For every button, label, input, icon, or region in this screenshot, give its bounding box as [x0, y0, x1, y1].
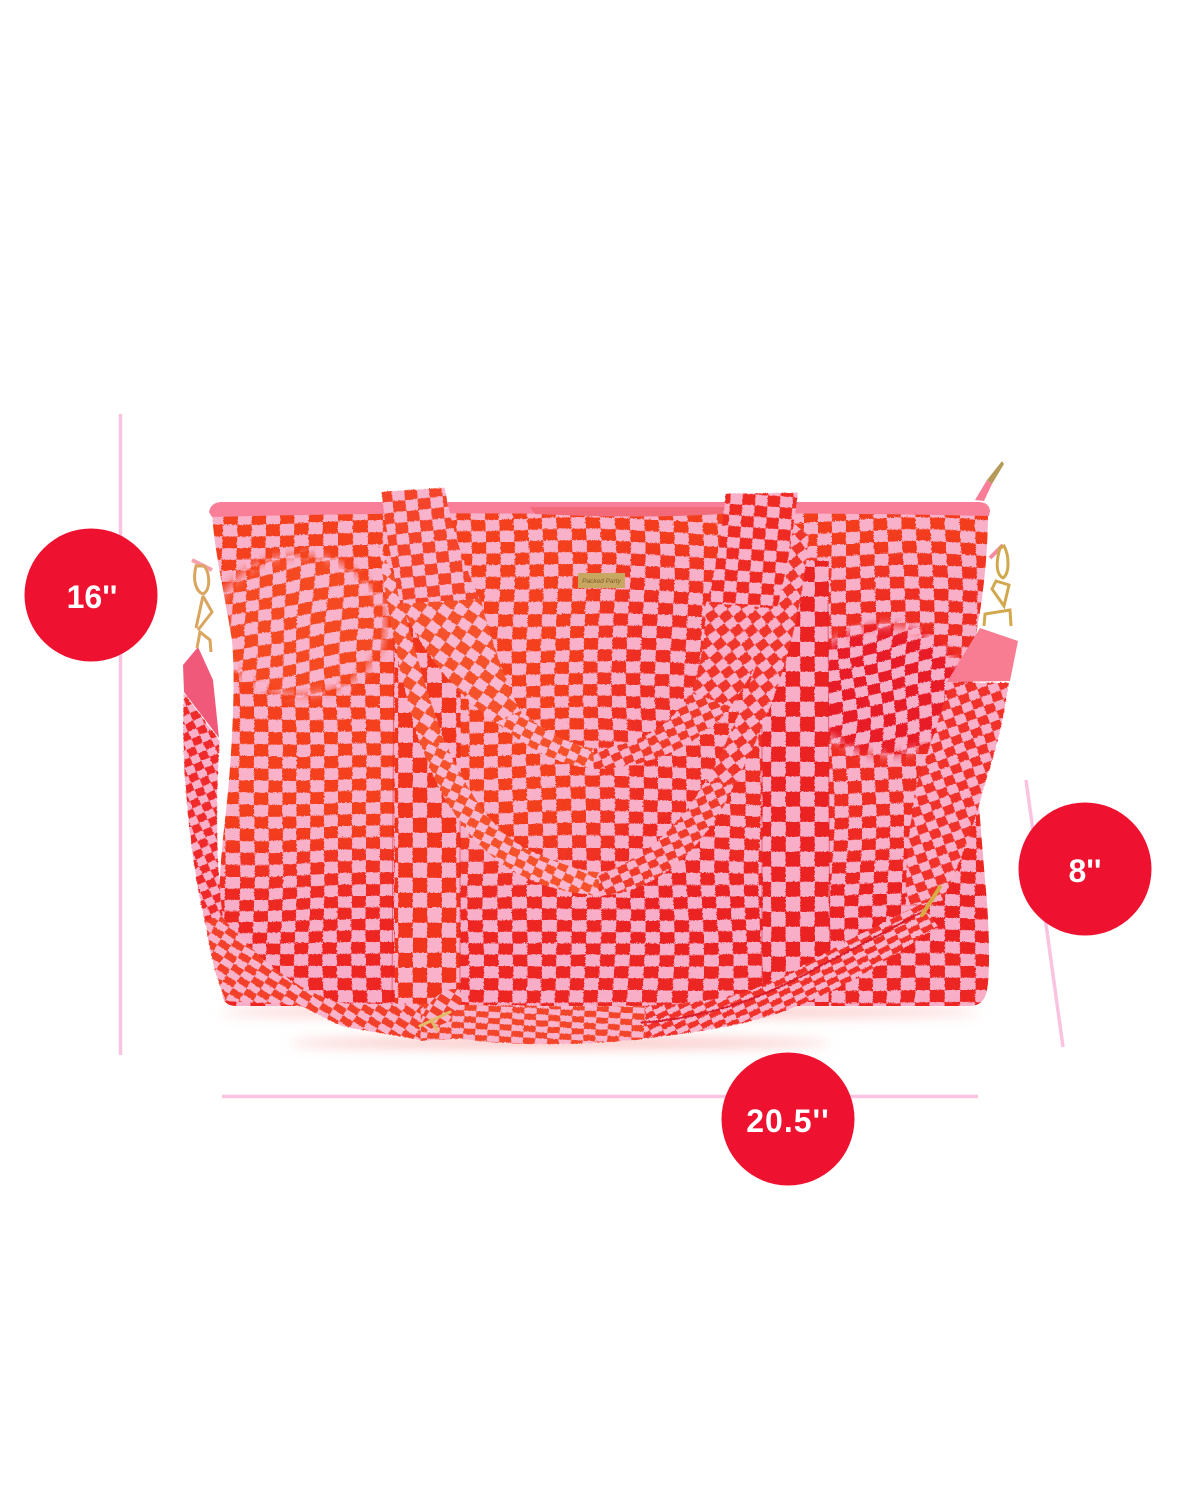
depth badge: 8 inches: [1018, 802, 1152, 936]
lower front handle: [378, 520, 808, 895]
strap left section: [205, 915, 430, 1040]
handle right upper: [705, 520, 808, 782]
handle top left: [381, 487, 480, 605]
strap right section: [645, 903, 937, 1037]
right warped fabric: [828, 618, 968, 762]
left shoulder strap: [182, 692, 222, 925]
strap fold: [640, 911, 922, 1022]
right leather tab: [947, 628, 1018, 682]
right pocket panel: [762, 560, 828, 1020]
strap centre section: [420, 1003, 660, 1043]
left warped fabric: [222, 548, 392, 702]
handle bottom right: [593, 692, 730, 768]
tote bag photo illustration: [180, 461, 1020, 1048]
height dimension line: [119, 414, 122, 1055]
inner opening: [530, 507, 725, 516]
zipper pull: [975, 461, 1004, 501]
right shoulder strap: [905, 682, 1008, 905]
left pocket panel: [394, 620, 460, 1020]
width badge: 20.5 inches: [722, 1052, 854, 1186]
top rim: [209, 502, 990, 517]
left swivel clasp: [192, 560, 212, 652]
height badge: 16 inches: 16'': [67, 579, 117, 615]
handle middle left: [400, 598, 520, 722]
handle middle right: [690, 602, 777, 708]
brand plate: Packed Party: [582, 578, 622, 585]
left leather tab: [183, 647, 219, 738]
strap slider right: [922, 887, 940, 915]
handle left lower: [420, 742, 600, 895]
right swivel clasp: [984, 545, 1011, 626]
depth dimension line: [1026, 780, 1063, 1047]
long bottom strap: [205, 903, 937, 1043]
height badge: 16 inches: [24, 528, 158, 662]
handle top right: [705, 492, 797, 612]
brand plate: [578, 573, 625, 588]
width dimension line: [222, 1095, 978, 1098]
handle bottom left: [495, 710, 595, 768]
base checker fabric: [212, 513, 990, 1006]
pocket seams: [392, 600, 830, 1005]
depth badge: 8 inches: 8'': [1068, 853, 1102, 889]
bag body: [212, 513, 990, 1006]
width badge: 20.5 inches: 20.5'': [746, 1103, 830, 1139]
handle left upper: [378, 545, 445, 745]
upper back handle: [381, 487, 797, 768]
ground shadow: [220, 1006, 980, 1048]
strap buckle bottom: [420, 989, 462, 1030]
handle right lower: [598, 780, 735, 895]
